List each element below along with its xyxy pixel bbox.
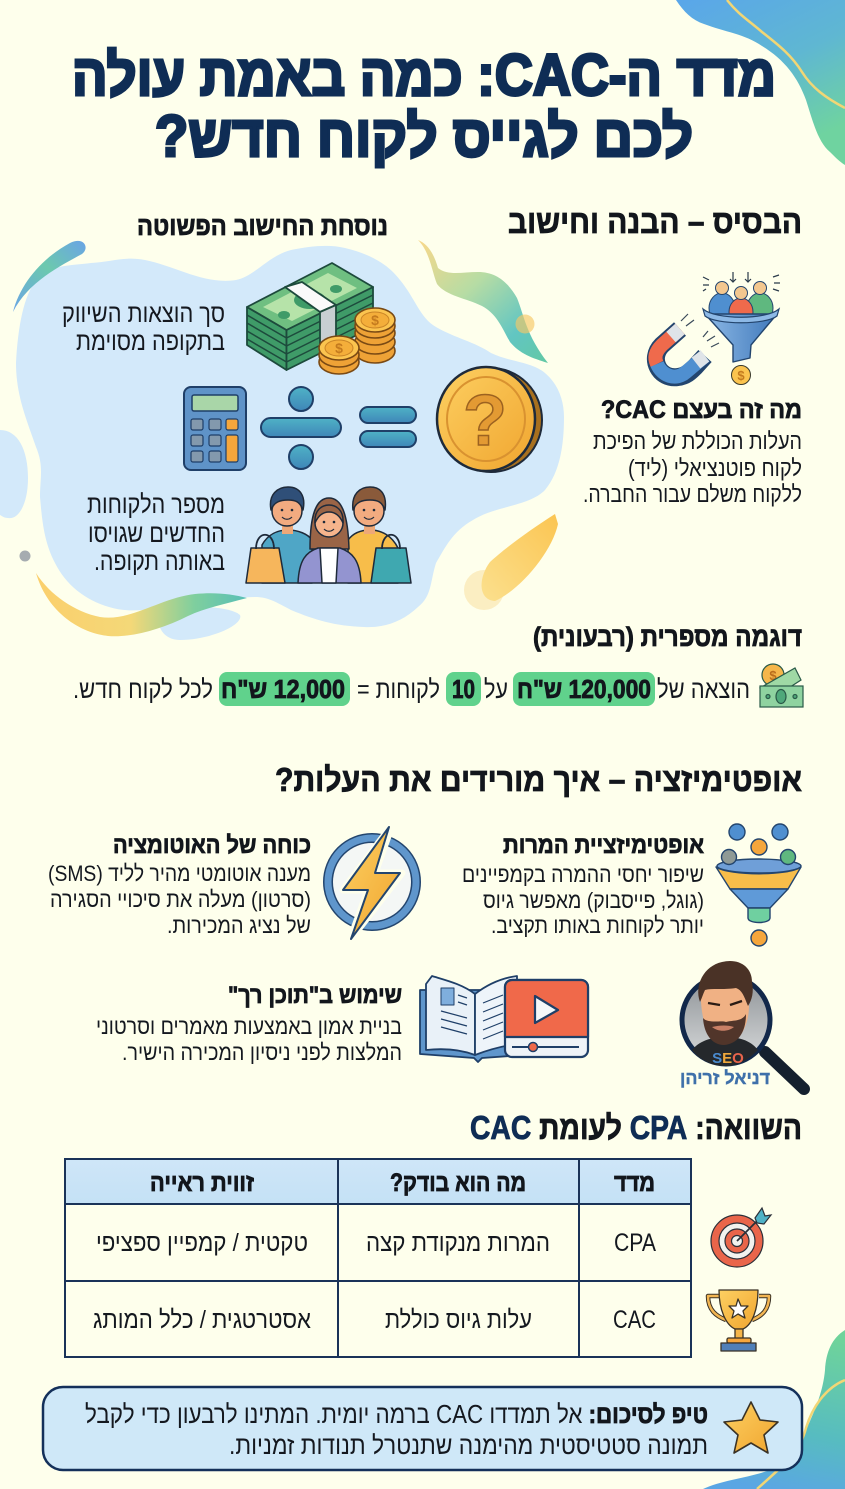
row: CPA: המרות מנקודת קצה — [366, 1229, 550, 1257]
icon: question coin: ? — [463, 381, 507, 461]
pill: 10 — [446, 672, 481, 706]
text block: what is CAC: העלות הכוללת של הפיכת — [593, 428, 802, 454]
label: total marketing spend: סך הוצאות השיווק — [62, 300, 225, 328]
icon: equals sign — [360, 407, 416, 447]
arrows and rays — [703, 272, 780, 291]
icon: conversion funnel — [716, 824, 801, 946]
header labels: מה הוא בודק? — [390, 1169, 526, 1197]
decoration: yellow swoosh — [464, 514, 558, 610]
hair — [698, 961, 753, 1006]
icon: three customers with bags — [246, 487, 411, 583]
decoration: bottom left swoosh — [36, 573, 247, 636]
sentence: לקוחות = — [357, 676, 440, 704]
dollar coin: $ — [737, 368, 745, 383]
text block: soft content: בניית אמון באמצעות מאמרים וסרטוני — [96, 1014, 402, 1039]
section heading: optimization: אופטימיזציה – איך מורידים את העלות? — [275, 761, 802, 798]
small coin stack — [319, 336, 359, 374]
sentence: 12,000 ש"ח — [221, 676, 345, 704]
icon: cash and coin — [760, 664, 803, 707]
icon: target — [711, 1208, 771, 1267]
label: new customers: החדשים שגויסו — [88, 520, 225, 548]
sentence: לכל לקוח חדש. — [73, 676, 213, 704]
text block: what is CAC: מה זה בעצם CAC? — [601, 396, 802, 424]
text block: power of automation: (סרטון) מעלה את סיכויי הסגירה — [50, 887, 311, 912]
header labels — [150, 1169, 655, 1197]
bag left — [246, 535, 285, 583]
sentence — [73, 676, 750, 704]
sentence: על — [484, 676, 508, 704]
label: total marketing spend: בתקופה מסוימת — [76, 328, 225, 356]
header labels: מדד — [614, 1169, 655, 1197]
heading: numeric example: דוגמה מספרית (רבעונית) — [533, 622, 802, 652]
label: new customers: באותה תקופה. — [94, 548, 225, 576]
row: CAC — [93, 1306, 656, 1334]
heading: formula: נוסחת החישוב הפשוטה — [137, 211, 388, 241]
sentence: 120,000 ש"ח — [517, 676, 651, 704]
label: new customers — [87, 491, 225, 576]
text block: power of automation: מענה אוטומטי מהיר לליד (SMS) — [48, 861, 311, 886]
magnet — [655, 314, 719, 377]
decoration: top right wave — [676, 0, 845, 165]
panel: summary tip — [43, 1387, 802, 1470]
text block: soft content: שימוש ב"תוכן רך" — [228, 982, 402, 1009]
icon: book and video — [420, 976, 588, 1062]
decoration: bottom right wave — [703, 1330, 845, 1489]
section heading: basics: הבסיס – הבנה וחישוב — [508, 203, 802, 240]
row: CAC: CAC — [613, 1306, 656, 1334]
tip box — [43, 1387, 802, 1470]
decoration: top left swoosh — [13, 241, 86, 312]
text block: soft content: המלצות לפני ניסיון המכירה הישיר. — [122, 1040, 402, 1065]
row: CPA: טקטית / קמפיין ספציפי — [96, 1229, 308, 1257]
row: CAC: עלות גיוס כוללת — [385, 1306, 532, 1334]
bag right — [371, 535, 411, 583]
sentence: הוצאה של — [657, 676, 750, 704]
tip text: טיפ לסיכום: אל תמדדו CAC ברמה יומית. המתינו לרבעון כדי לקבל — [85, 1401, 708, 1429]
woman — [298, 498, 361, 583]
text block: what is CAC: לקוח פוטנציאלי (ליד) — [628, 455, 802, 481]
decoration: right swoosh dot — [516, 314, 534, 334]
text block: power of automation: של נציג המכירות. — [167, 913, 311, 938]
text block: power of automation — [48, 832, 311, 938]
icon: cash and coin: $ — [769, 668, 777, 683]
panel: formula blob — [0, 240, 564, 640]
avatar: magnifier logo — [680, 961, 804, 1089]
table grid — [65, 1159, 691, 1357]
text block: what is CAC: ללקוח משלם עבור החברה. — [583, 481, 802, 507]
pill: 120,000 — [513, 672, 655, 706]
comparison table — [65, 1159, 691, 1357]
left man — [262, 487, 312, 583]
icon: money stack and coins: $ — [371, 312, 379, 328]
title — [72, 43, 776, 169]
text block: power of automation: כוחה של האוטומציה — [113, 832, 311, 859]
text block: conversion optimization: (גוגל, פייסבוק) מאפשר גיוס — [483, 888, 704, 913]
big coin stack — [355, 308, 395, 363]
text block: conversion optimization: אופטימיזציית המרות — [503, 832, 704, 859]
numeric example line — [73, 664, 803, 707]
decoration: right swoosh — [418, 240, 548, 363]
text block: soft content — [96, 982, 402, 1065]
video player — [505, 980, 588, 1057]
icon: question coin — [437, 367, 542, 472]
decoration: pale blobs — [0, 430, 240, 640]
tip text: תמונה סטטיסטית מהימנה שתנטרל תנודות זמניות. — [229, 1432, 708, 1460]
blob background — [16, 246, 564, 627]
header labels: זווית ראייה — [150, 1169, 254, 1197]
row: CPA: CPA — [614, 1229, 656, 1257]
SEO: SEO — [712, 1050, 744, 1067]
name: דניאל זריהן — [680, 1068, 770, 1088]
section heading: CPA vs CAC: השוואה: CPA לעומת CAC — [470, 1109, 802, 1146]
portrait circle — [682, 976, 770, 1064]
icon: magnet and funnel — [655, 272, 780, 384]
icon: calculator — [184, 387, 246, 470]
decoration: gray dot — [20, 550, 30, 562]
label: total marketing spend — [62, 300, 225, 356]
people in funnel — [709, 282, 773, 326]
label: new customers: מספר הלקוחות — [87, 491, 225, 519]
right man — [348, 487, 398, 583]
sentence: 10 — [452, 676, 475, 704]
title: לכם לגייס לקוח חדש? — [155, 104, 693, 169]
icon: star — [724, 1402, 778, 1453]
row: CPA — [96, 1229, 656, 1257]
row: CAC: אסטרטגית / כלל המותג — [93, 1306, 311, 1334]
title: מדד ה-CAC: כמה באמת עולה — [72, 43, 776, 108]
table header — [65, 1159, 691, 1204]
funnel body — [705, 314, 777, 362]
icon: money stack and coins: $ — [335, 340, 343, 356]
text block: conversion optimization: שיפור יחסי ההמרה בקמפיינים — [462, 862, 704, 887]
magnifier handle — [765, 1052, 804, 1089]
icon: money stack and coins — [247, 263, 395, 374]
text block: what is CAC — [583, 396, 802, 507]
text block: conversion optimization: יותר לקוחות באותו תקציב. — [491, 913, 704, 938]
pill: 12,000 — [219, 672, 350, 706]
icon: lightning bolt — [328, 825, 416, 940]
eyes — [708, 1001, 742, 1005]
tip text — [85, 1401, 708, 1460]
face — [701, 984, 749, 1043]
text block: conversion optimization — [462, 832, 704, 938]
icon: trophy — [708, 1290, 769, 1351]
icon: division sign — [261, 387, 341, 469]
